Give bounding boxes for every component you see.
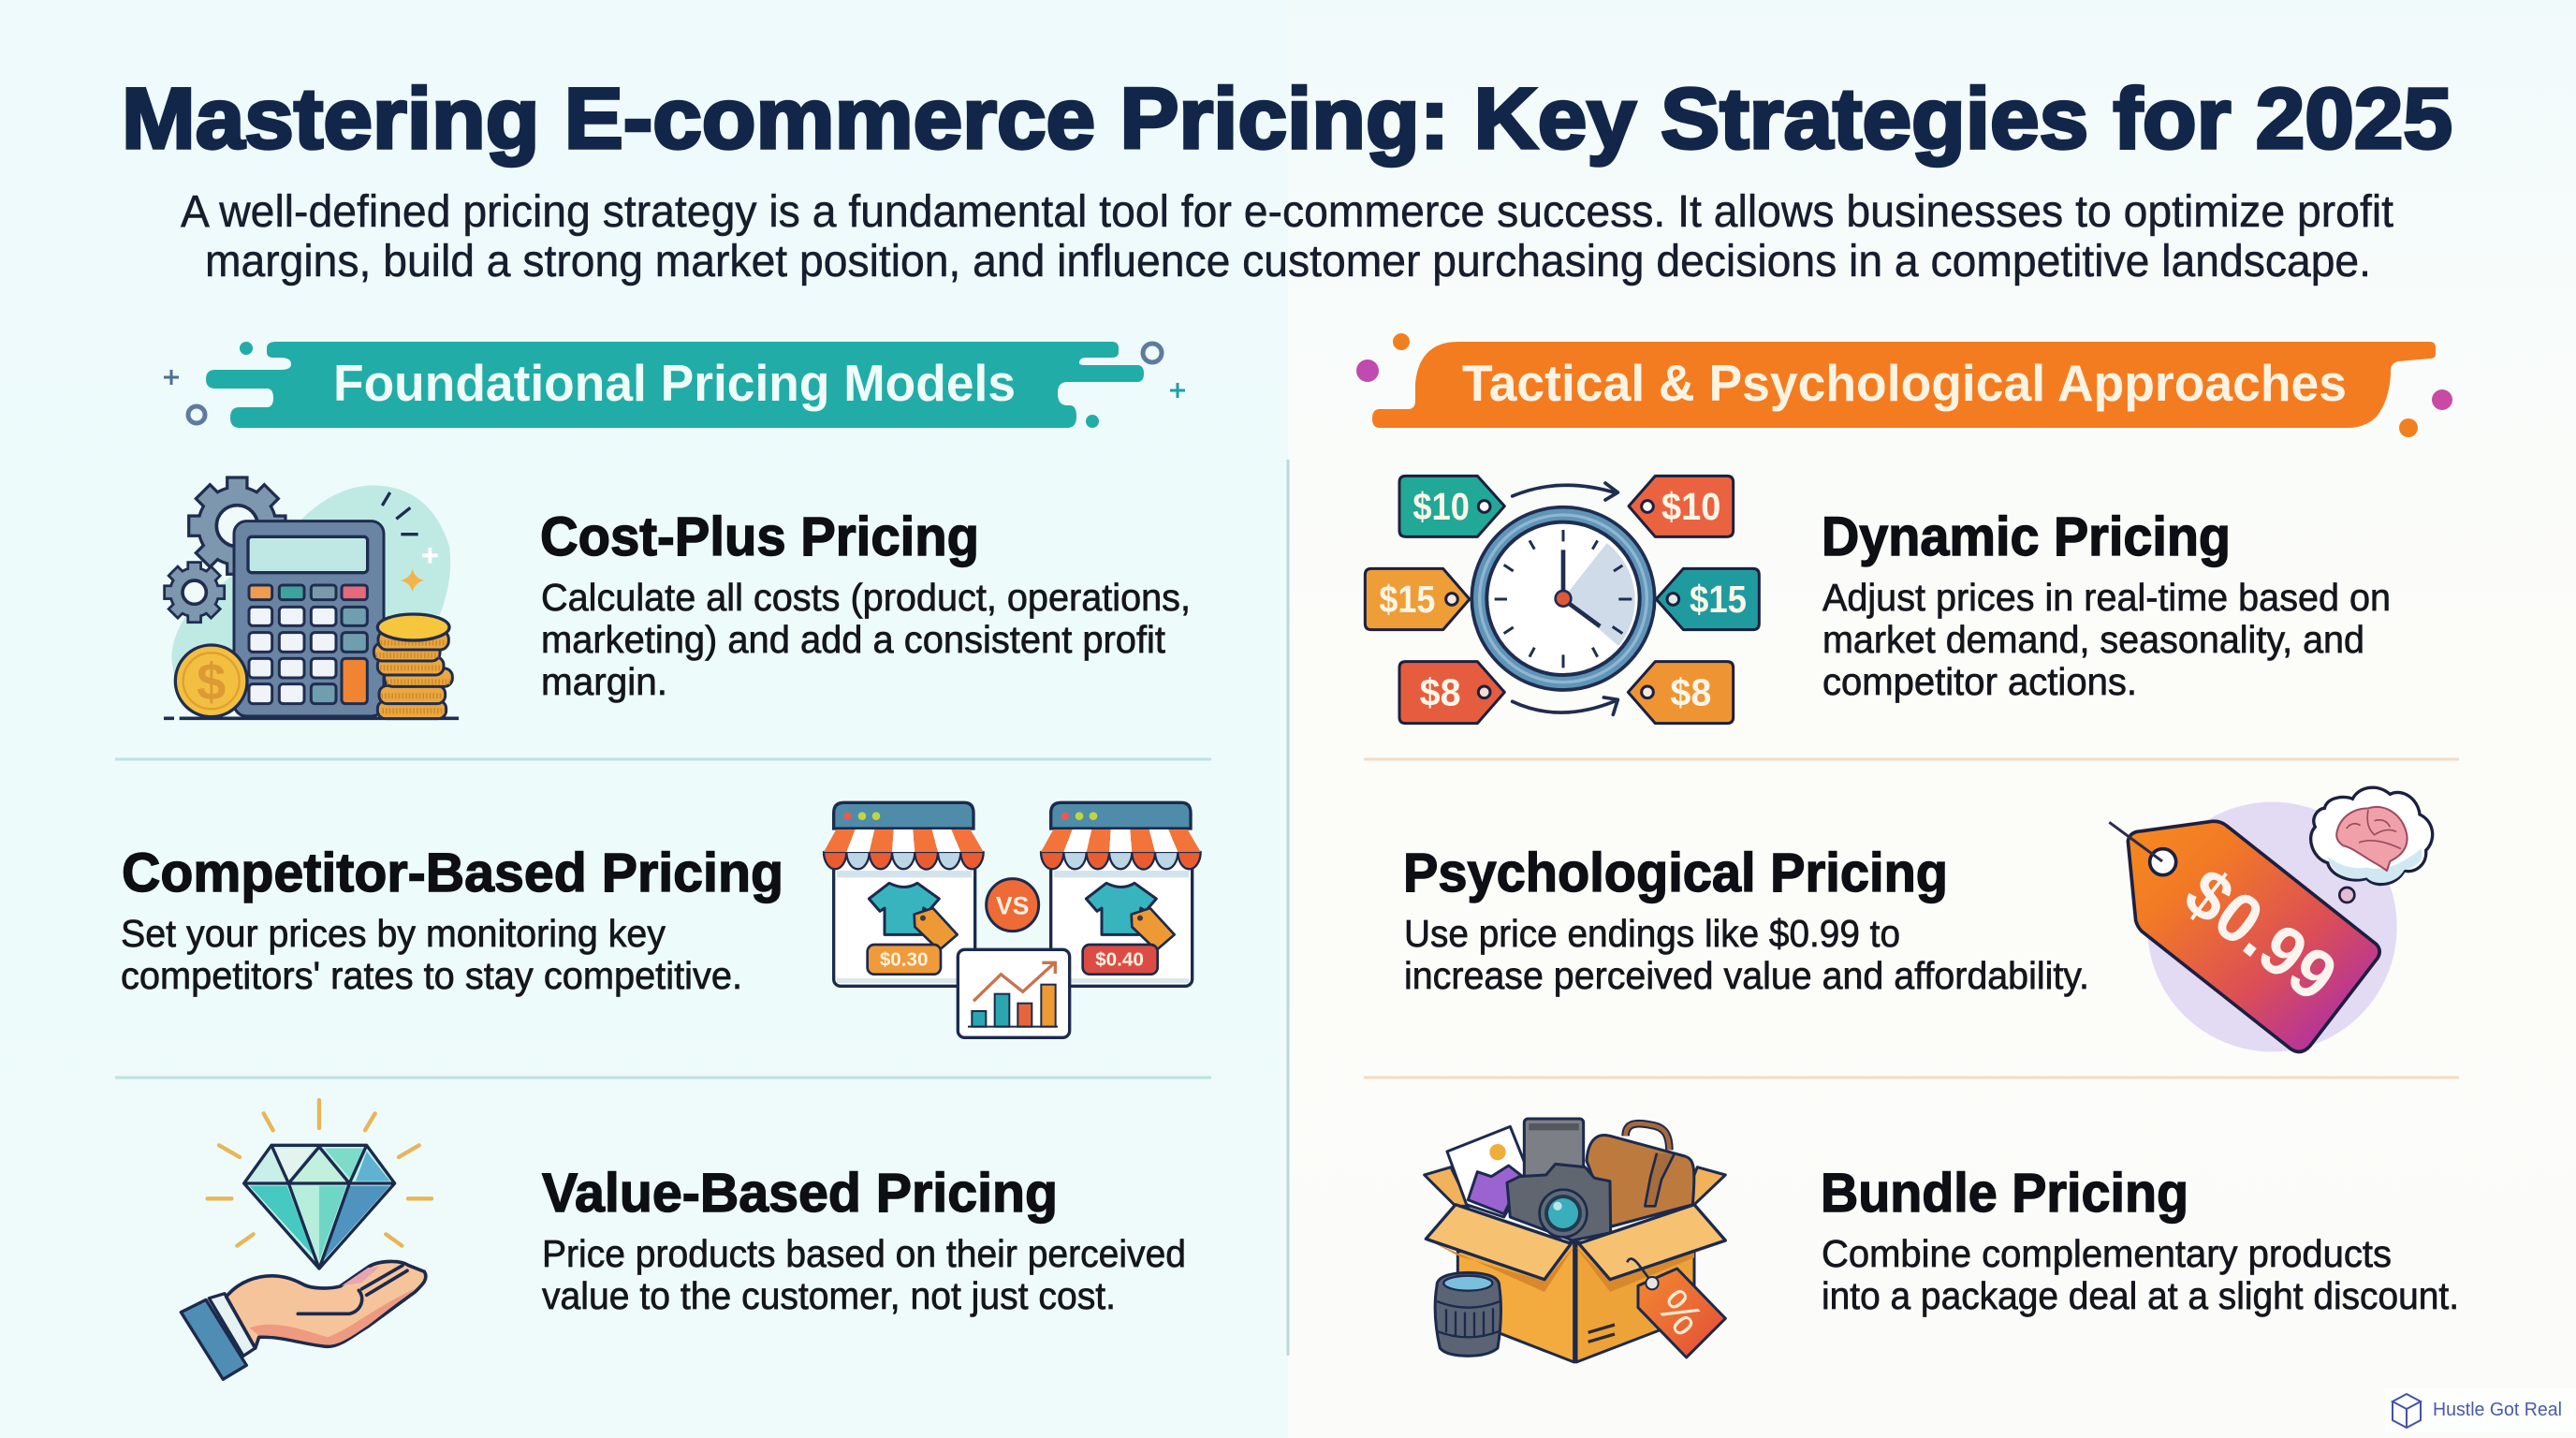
- icon: clock with price tags: [1365, 476, 1759, 724]
- item: dynamic pricing: competitor actions.: [1822, 660, 2137, 703]
- item: value-based pricing: value to the customer, not just cost.: [542, 1274, 1116, 1317]
- icon: clock with price tags: $8: [1670, 670, 1711, 713]
- item: bundle pricing: Combine complementary products: [1822, 1232, 2392, 1275]
- item: competitor-based pricing: [121, 843, 783, 997]
- icon: calculator with gears and coins: [164, 479, 459, 719]
- item: dynamic pricing: Adjust prices in real-time based on: [1822, 576, 2391, 619]
- watermark: hustle got real: Hustle Got Real: [2433, 1400, 2562, 1420]
- intro paragraph: [181, 187, 2393, 286]
- banner: tactical and psychological approaches: [1356, 333, 2452, 437]
- vs badge: [987, 879, 1039, 932]
- item: value-based pricing: Price products based on their perceived: [542, 1232, 1186, 1275]
- price pill: left store: $0.30: [880, 949, 929, 971]
- icon: open box bundle: [1425, 1119, 1725, 1362]
- intro paragraph: A well-defined pricing strategy is a fundamental tool for e-commerce success. It allows businesses to optimize profit: [181, 187, 2393, 237]
- icon: competing web stores: [824, 802, 1201, 1037]
- banner: foundational pricing models: [164, 342, 1185, 428]
- title: Mastering E-commerce Pricing: Key Strategies for 2025: [122, 71, 2452, 167]
- item: competitor-based pricing: competitors' rates to stay competitive.: [121, 954, 742, 997]
- item: competitor-based pricing: Set your prices by monitoring key: [121, 912, 666, 955]
- banner label: Tactical & Psychological Approaches: [1462, 354, 2347, 412]
- item: value-based pricing: [542, 1163, 1186, 1317]
- icon: psychological price tag: $0.99: [2171, 853, 2351, 1016]
- item: psychological pricing: Psychological Pricing: [1403, 843, 1948, 903]
- watermark: hustle got real: [2385, 1388, 2576, 1432]
- item: dynamic pricing: market demand, seasonality, and: [1822, 618, 2364, 661]
- icon: clock with price tags: $15: [1690, 578, 1747, 621]
- icon: psychological price tag: [2109, 787, 2433, 1051]
- item: cost-plus pricing: Calculate all costs (product, operations,: [541, 576, 1191, 619]
- banner label: Foundational Pricing Models: [333, 354, 1016, 412]
- chart card: [958, 949, 1070, 1037]
- item: bundle pricing: into a package deal at a slight discount.: [1822, 1274, 2459, 1317]
- item: dynamic pricing: Dynamic Pricing: [1822, 506, 2231, 567]
- icon: clock with price tags: $15: [1379, 578, 1435, 621]
- icon: diamond over open hand: [181, 1100, 432, 1379]
- icon: calculator with gears and coins: $: [197, 652, 226, 711]
- item: dynamic pricing: [1822, 506, 2391, 703]
- icon: clock with price tags: $10: [1661, 485, 1720, 528]
- item: cost-plus pricing: [540, 506, 1191, 703]
- vs badge: VS: [996, 892, 1029, 920]
- icon: open box bundle: %: [1647, 1280, 1713, 1345]
- item: cost-plus pricing: Cost-Plus Pricing: [540, 506, 979, 567]
- item: psychological pricing: [1403, 843, 2089, 997]
- item: value-based pricing: Value-Based Pricing: [542, 1163, 1058, 1224]
- item: bundle pricing: [1821, 1163, 2459, 1317]
- intro paragraph: margins, build a strong market position, and influence customer purchasing decisions in a competitive landscape.: [205, 237, 2371, 286]
- item: psychological pricing: Use price endings like $0.99 to: [1404, 912, 1900, 955]
- item: bundle pricing: Bundle Pricing: [1821, 1163, 2188, 1224]
- price pill: right store: $0.40: [1095, 949, 1144, 971]
- price pill: right store: [1083, 945, 1158, 975]
- item: psychological pricing: increase perceived value and affordability.: [1404, 954, 2089, 997]
- icon: clock with price tags: $10: [1412, 485, 1470, 528]
- item: cost-plus pricing: marketing) and add a consistent profit: [541, 618, 1166, 661]
- item: cost-plus pricing: margin.: [541, 660, 667, 703]
- price pill: left store: [868, 945, 941, 975]
- item: competitor-based pricing: Competitor-Based Pricing: [122, 843, 783, 903]
- dividers: [115, 460, 2459, 1356]
- icon: clock with price tags: $8: [1420, 670, 1461, 713]
